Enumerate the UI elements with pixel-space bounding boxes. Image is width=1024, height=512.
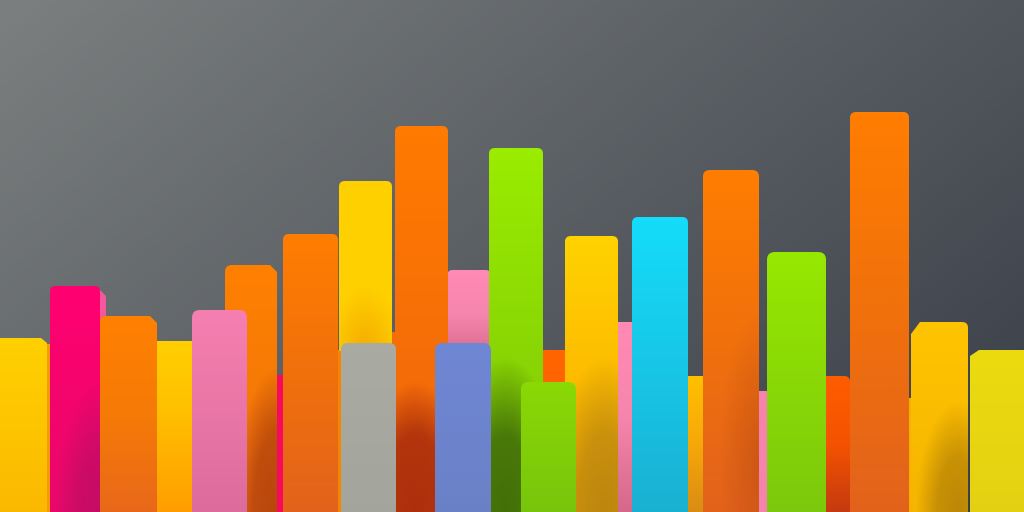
bar: orange tallest centre bbox=[395, 126, 448, 512]
bar: yellow middle bbox=[565, 236, 618, 512]
bar: orange right bbox=[703, 170, 759, 512]
bar: orange tall bbox=[283, 234, 338, 512]
bar: amber right bbox=[911, 322, 968, 512]
back bars: slivers visible behind the front row bbox=[44, 270, 914, 512]
bar: orange tallest right bbox=[850, 112, 909, 512]
bar: green right bbox=[767, 252, 826, 512]
bar: lemon yellow bbox=[970, 350, 1024, 512]
bar: green short bbox=[521, 382, 576, 512]
bar: pink bbox=[192, 310, 247, 512]
bar: blue bbox=[435, 343, 491, 512]
bar: cyan bbox=[632, 217, 688, 512]
bar: grey bbox=[341, 343, 396, 512]
bar: orange bbox=[100, 316, 157, 512]
bar: yellow bbox=[0, 338, 47, 512]
bar: green tall bbox=[489, 148, 543, 512]
bar: magenta bbox=[50, 286, 100, 512]
bar: orange behind pink bbox=[225, 265, 277, 512]
bar: yellow tall bbox=[339, 181, 392, 351]
